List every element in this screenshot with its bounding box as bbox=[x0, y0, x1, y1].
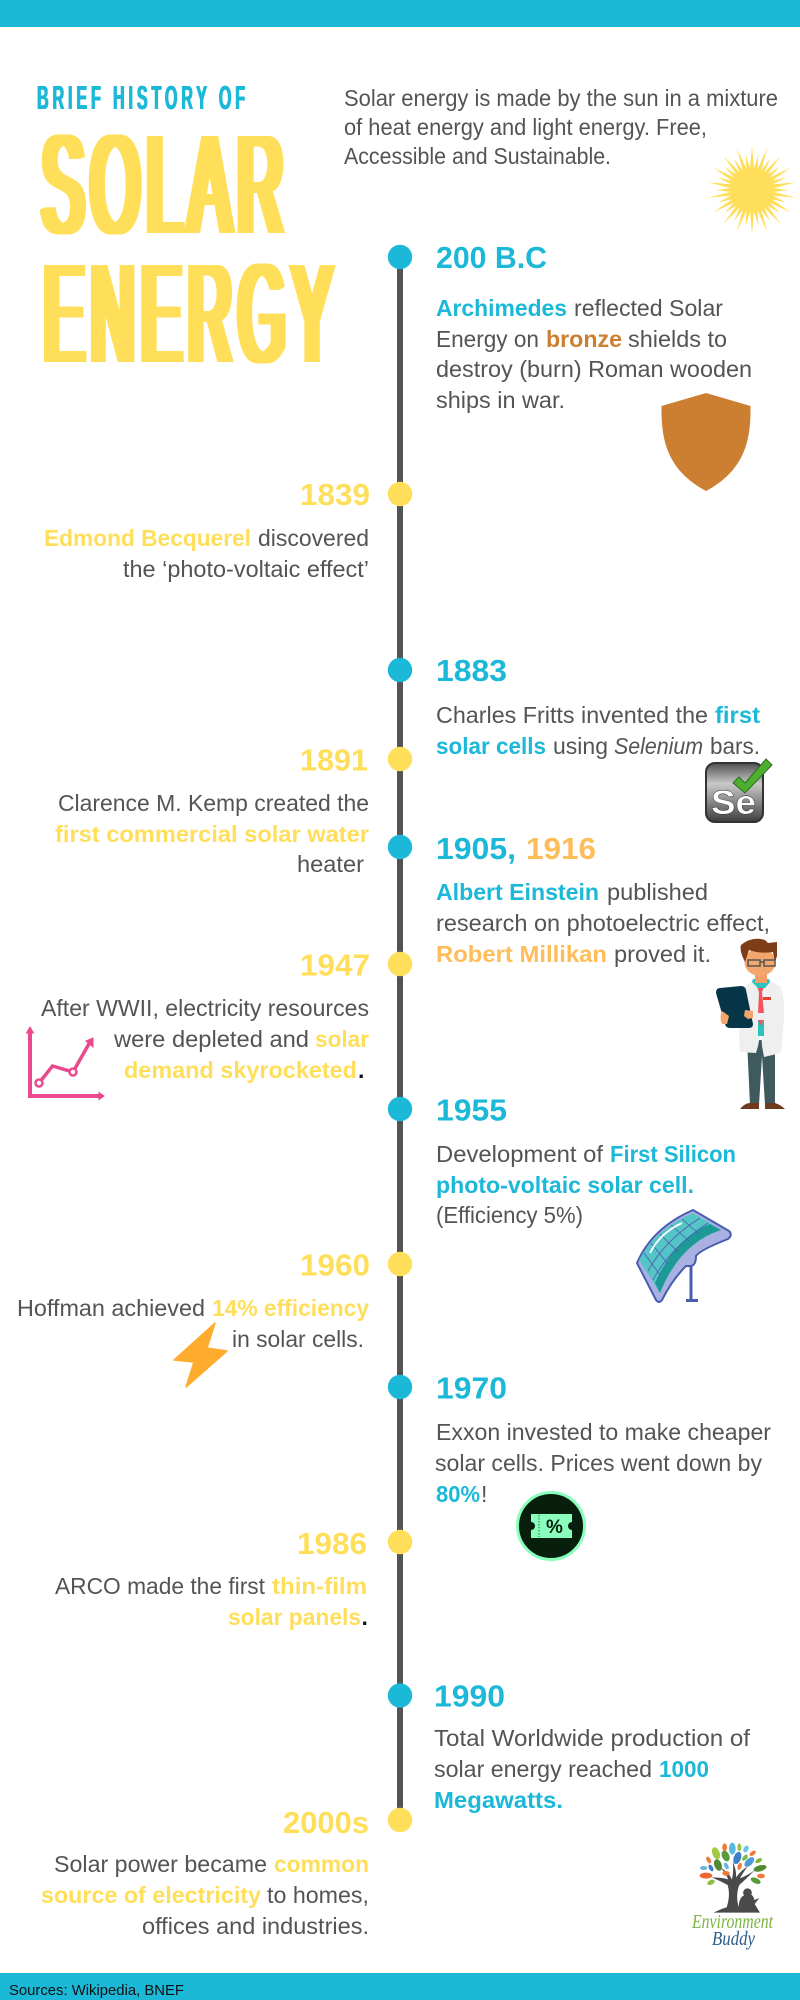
description: first bbox=[715, 702, 760, 728]
description: shields to bbox=[628, 326, 727, 352]
description: Archimedes bbox=[436, 295, 567, 321]
description: proved it. bbox=[614, 941, 711, 967]
bottom bar bbox=[0, 1973, 800, 2000]
description: discovered bbox=[258, 525, 369, 551]
description bbox=[436, 1141, 736, 1228]
logo wordmark second line: Buddy bbox=[712, 1928, 755, 1950]
hands bbox=[720, 1010, 753, 1024]
description: Edmond Becquerel bbox=[44, 525, 251, 551]
year: 1960 bbox=[300, 1248, 370, 1282]
description: destroy (burn) Roman wooden bbox=[436, 356, 752, 382]
description: . bbox=[358, 1057, 364, 1083]
description: first commercial solar water bbox=[55, 821, 369, 847]
intro text: Accessible and Sustainable. bbox=[344, 143, 611, 169]
description: the ‘photo-voltaic effect’ bbox=[123, 556, 369, 582]
description: solar cells bbox=[436, 733, 546, 759]
description: source of electricity bbox=[41, 1882, 261, 1908]
description: bars. bbox=[710, 733, 760, 759]
description: 14% efficiency bbox=[212, 1295, 369, 1321]
description bbox=[44, 525, 369, 582]
tree bbox=[700, 1843, 767, 1913]
description: Clarence M. Kemp created the bbox=[58, 790, 369, 816]
year bbox=[436, 831, 596, 866]
description: Energy on bbox=[436, 326, 539, 352]
icon: bronze shield bbox=[661, 393, 751, 491]
neck and face bbox=[755, 972, 767, 983]
description bbox=[436, 295, 752, 413]
description bbox=[55, 790, 369, 877]
description: First Silicon bbox=[610, 1141, 736, 1167]
shirt and tie bbox=[758, 1020, 764, 1036]
description: Megawatts. bbox=[434, 1787, 563, 1813]
glasses bbox=[748, 960, 775, 966]
description: solar bbox=[315, 1026, 369, 1052]
event: 200 B.C bbox=[388, 240, 752, 491]
text: ENERGY bbox=[44, 234, 339, 392]
legs bbox=[747, 1040, 775, 1105]
description: (Efficiency 5%) bbox=[436, 1202, 583, 1228]
sources: Sources: Wikipedia, BNEF bbox=[9, 1982, 184, 1999]
dot bbox=[388, 1375, 412, 1399]
icon: rising chart bbox=[26, 1027, 104, 1100]
year: 1905, bbox=[436, 831, 516, 866]
dot bbox=[388, 1097, 412, 1121]
year: 2000s bbox=[283, 1805, 369, 1840]
description: . bbox=[362, 1604, 368, 1630]
dot bbox=[388, 1530, 412, 1554]
year: 1891 bbox=[300, 742, 368, 778]
year: 1916 bbox=[526, 831, 596, 866]
year: 1839 bbox=[300, 477, 370, 512]
event: 1947 bbox=[26, 948, 412, 1100]
description: solar panels bbox=[228, 1604, 361, 1630]
description: Charles Fritts invented the bbox=[436, 702, 708, 728]
description: to homes, bbox=[267, 1882, 369, 1908]
event: 1986 bbox=[55, 1526, 412, 1630]
description: 1000 bbox=[659, 1756, 709, 1782]
timeline spine bbox=[397, 257, 403, 1820]
logo: Environment Buddy bbox=[691, 1843, 773, 1950]
description: After WWII, electricity resources bbox=[41, 995, 369, 1021]
year: 1986 bbox=[297, 1526, 367, 1561]
description: ARCO made the first bbox=[55, 1573, 266, 1599]
description bbox=[41, 1851, 369, 1939]
event: 1905, 1916 bbox=[388, 831, 785, 1109]
hair bbox=[740, 939, 777, 962]
icon: sun bbox=[708, 146, 796, 234]
description: Robert Millikan bbox=[436, 941, 607, 967]
dot bbox=[388, 1252, 412, 1276]
event: 1891 bbox=[55, 742, 412, 877]
description: Selenium bbox=[614, 733, 703, 759]
description bbox=[435, 1419, 771, 1507]
description: research on photoelectric effect, bbox=[436, 910, 770, 936]
description: in solar cells. bbox=[232, 1326, 364, 1352]
description bbox=[434, 1725, 751, 1813]
description: Total Worldwide production of bbox=[434, 1725, 751, 1751]
description bbox=[41, 995, 369, 1083]
description bbox=[55, 1573, 368, 1630]
event: 1960 bbox=[17, 1248, 412, 1387]
dot bbox=[388, 835, 412, 859]
title block: SOLAR bbox=[42, 105, 290, 263]
description: Exxon invested to make cheaper bbox=[436, 1419, 771, 1445]
event: 1990 bbox=[388, 1678, 751, 1813]
icon: scientist bbox=[716, 939, 785, 1109]
description: common bbox=[274, 1851, 369, 1877]
event: 1970 bbox=[388, 1370, 771, 1560]
description: Albert Einstein bbox=[436, 879, 599, 905]
description: Hoffman achieved bbox=[17, 1295, 205, 1321]
icon: selenium logo bbox=[706, 759, 772, 822]
description: solar energy reached bbox=[434, 1756, 652, 1782]
intro text: of heat energy and light energy. Free, bbox=[344, 114, 707, 140]
coat bbox=[739, 981, 784, 1057]
description: offices and industries. bbox=[142, 1913, 369, 1939]
title block bbox=[37, 80, 339, 392]
event: 2000s bbox=[41, 1805, 412, 1939]
tablet bbox=[716, 986, 753, 1028]
intro text: Solar energy is made by the sun in a mixture bbox=[344, 85, 778, 111]
year: 1883 bbox=[436, 653, 507, 688]
description: 80% bbox=[436, 1481, 480, 1507]
title block: BRIEF HISTORY OF bbox=[37, 80, 249, 117]
description bbox=[436, 879, 770, 967]
icon: lightning bolt bbox=[174, 1323, 227, 1387]
description: bronze bbox=[546, 326, 622, 352]
description: were depleted and bbox=[113, 1026, 309, 1052]
dot bbox=[388, 952, 412, 976]
description: Solar power became bbox=[54, 1851, 267, 1877]
description: heater bbox=[297, 851, 364, 877]
event: 1839 bbox=[44, 477, 412, 582]
icon: solar panel bbox=[637, 1210, 731, 1302]
description: published bbox=[607, 879, 708, 905]
top bar bbox=[0, 0, 800, 27]
logo wordmark: Environment bbox=[691, 1911, 773, 1933]
icon: discount ticket badge: % bbox=[546, 1517, 563, 1538]
year: 1970 bbox=[436, 1370, 507, 1406]
dot bbox=[388, 245, 412, 269]
dot bbox=[388, 1808, 412, 1832]
description: demand skyrocketed bbox=[124, 1057, 357, 1083]
description: ! bbox=[481, 1481, 487, 1507]
description bbox=[17, 1295, 369, 1352]
description: thin-film bbox=[272, 1573, 367, 1599]
intro text bbox=[344, 85, 778, 169]
year: 1947 bbox=[300, 948, 370, 982]
description: photo-voltaic solar cell. bbox=[436, 1172, 694, 1198]
dot bbox=[388, 747, 412, 771]
icon: discount ticket badge bbox=[518, 1492, 584, 1560]
dot bbox=[388, 482, 412, 506]
year: 200 B.C bbox=[436, 240, 547, 275]
description: using bbox=[553, 733, 608, 759]
description: solar cells. Prices went down by bbox=[435, 1450, 762, 1476]
year: 1955 bbox=[436, 1092, 507, 1128]
dot bbox=[388, 1683, 412, 1708]
year: 1990 bbox=[434, 1678, 505, 1714]
event: 1883 bbox=[388, 653, 772, 822]
event: 1955 bbox=[388, 1092, 736, 1302]
description bbox=[436, 702, 760, 759]
description: ships in war. bbox=[436, 387, 565, 413]
description: reflected Solar bbox=[574, 295, 723, 321]
dot bbox=[388, 658, 412, 682]
icon: selenium logo: Se bbox=[711, 784, 756, 822]
description: Development of bbox=[436, 1141, 604, 1167]
